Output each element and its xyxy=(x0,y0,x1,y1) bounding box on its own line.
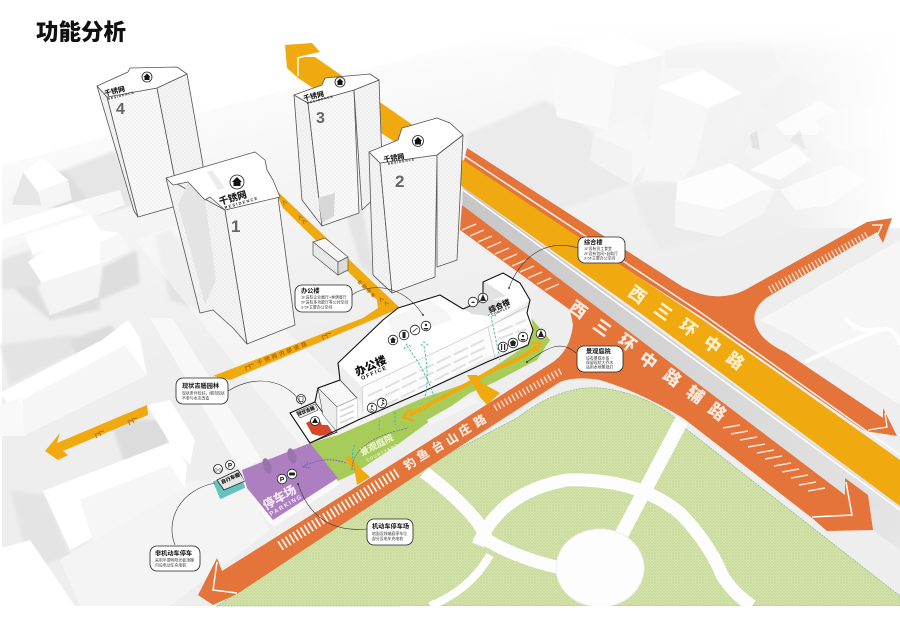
park paths xyxy=(424,420,752,606)
small box building xyxy=(313,238,348,275)
callout: 综合楼: 2F设有包间+自助厅 xyxy=(584,251,618,256)
road label: 西三环中路辅路: 环 xyxy=(615,330,639,356)
yellow main road with arrow xyxy=(285,43,900,510)
building labels: 办公楼 xyxy=(353,353,388,379)
courtyard green xyxy=(310,313,550,485)
tower 1: RESIDENCE xyxy=(224,195,259,210)
callout: 现状吉膳园林: 不参与本次改造 xyxy=(182,396,209,400)
tower 4 xyxy=(97,67,203,217)
tower 1: 千锈网 xyxy=(218,188,248,208)
east-west orange road with east arrow xyxy=(463,148,897,436)
courtyard route xyxy=(410,347,537,415)
parking lot: PARKING xyxy=(269,494,304,518)
courtyard label: 景观庭院 xyxy=(358,432,395,458)
residential lane xyxy=(45,187,400,460)
callout: 综合楼: 3-5F主要办公空间 xyxy=(584,256,615,261)
function icons xyxy=(367,293,546,413)
road label: 西三环中路: 西 xyxy=(625,282,649,308)
existing garden pavilion: 现状吉膳 xyxy=(296,404,316,418)
bicycle shed: P xyxy=(228,464,232,470)
residential lane: 长期停车 xyxy=(356,278,378,300)
title: 功能分析 xyxy=(36,20,126,45)
office and complex building: COMPLEX xyxy=(491,305,511,317)
road label: 西三环中路 xyxy=(625,282,747,374)
lane label: 千锈网内部道路 xyxy=(256,339,310,367)
road label: 钓鱼台山庄路: 山 xyxy=(443,429,461,448)
facade xyxy=(362,308,533,412)
callout: 办公楼: 办公楼 xyxy=(301,287,320,295)
tower 1 xyxy=(166,152,295,344)
road label: 西三环中路辅路: 中 xyxy=(636,348,661,374)
context buildings: north-east xyxy=(400,28,900,405)
office and complex building: 综合楼 xyxy=(487,296,512,315)
tower 2: 千锈网 xyxy=(383,151,405,164)
road label: 钓鱼台山庄路 xyxy=(401,411,489,473)
tower 4: 4 xyxy=(116,101,125,118)
callout: 现状吉膳园林 xyxy=(176,378,228,404)
circulation arrows xyxy=(352,313,500,470)
road label: 钓鱼台山庄路: 鱼 xyxy=(414,445,432,464)
road label: 西三环中路: 三 xyxy=(651,299,675,325)
road label: 钓鱼台山庄路: 庄 xyxy=(456,420,474,439)
office and complex building xyxy=(290,273,546,470)
callout: 非机动车停车: 采用半透明阳光板顶棚 xyxy=(155,558,194,562)
road label: 钓鱼台山庄路: 路 xyxy=(471,411,489,430)
road label: 西三环中路: 路 xyxy=(723,348,747,374)
callout: 景观庭院: 设有景观水系 xyxy=(586,356,609,360)
office and complex building: OFFICE xyxy=(360,365,389,382)
tower 3: 千锈网 xyxy=(302,89,325,103)
tower 2: RESIDENCE xyxy=(387,157,415,166)
callout: 机动车停车场 xyxy=(367,519,413,545)
callout: 综合楼 xyxy=(578,237,625,263)
callout: 非机动车停车: 内设电动车充电桩 xyxy=(155,562,186,568)
road label: 西三环中路辅路: 路 xyxy=(660,365,684,391)
callout: 办公楼: 1F设有企业展厅+林荫餐厅 xyxy=(301,294,347,300)
callout: 办公楼: 2F设有多功能厅等公共空间 xyxy=(301,300,348,304)
bicycle shed: 自行车棚 xyxy=(220,471,241,486)
callout: 现状吉膳园林: 现状吉膳园林 xyxy=(182,382,220,390)
road label: 西三环中路辅路: 辅 xyxy=(683,382,708,408)
callout: 非机动车停车 xyxy=(150,546,200,571)
crosswalks xyxy=(280,472,398,546)
callout: 机动车停车场: 部分设电车充电桩 xyxy=(372,536,403,541)
context buildings: west xyxy=(0,158,195,606)
median xyxy=(462,187,900,550)
road label: 西三环中路辅路: 西 xyxy=(566,297,590,323)
roof xyxy=(338,273,530,387)
tower 3: 3 xyxy=(316,110,325,127)
tower 3: RESIDENCE xyxy=(306,94,334,105)
tower 2: 2 xyxy=(395,172,404,191)
callout: 非机动车停车: 非机动车停车 xyxy=(155,550,192,558)
callout: 景观庭院: 运用本地景观灯 xyxy=(586,364,613,370)
outline xyxy=(290,273,533,443)
road label: 钓鱼台山庄路: 台 xyxy=(429,437,447,456)
road label: 西三环中路: 中 xyxy=(700,332,725,358)
road label: 钓鱼台山庄路: 钓 xyxy=(401,454,419,473)
callout: 办公楼 xyxy=(295,285,352,312)
parking lot: P xyxy=(280,476,285,484)
tower 4: RESIDENCE xyxy=(107,90,135,101)
road label: 西三环中路辅路: 三 xyxy=(590,315,614,341)
road label: 西三环中路辅路 xyxy=(566,297,729,425)
callout: 综合楼: 1F设有员工食堂 xyxy=(584,246,612,251)
connector lines xyxy=(172,245,578,545)
circular plaza xyxy=(556,529,644,607)
road label: 西三环中路辅路: 路 xyxy=(705,399,729,425)
callout: 现状吉膳园林: 现状条件较好，维持现状 xyxy=(182,390,225,396)
main orange road: 钓鱼台山庄路 and 西三环中路辅路 xyxy=(198,205,873,605)
bicycle shed xyxy=(212,460,246,500)
existing garden pavilion xyxy=(290,394,337,443)
tower 1: 1 xyxy=(231,217,240,236)
callout: 机动车停车场: 地面设线端庭停车位 xyxy=(372,531,407,536)
parking lot: 停车场 xyxy=(260,482,299,513)
courtyard green: COURTYARD xyxy=(365,442,399,463)
callout: 景观庭院 xyxy=(577,346,623,372)
crosswalk: east arm xyxy=(770,235,868,290)
callout: 景观庭院: 景观庭院 xyxy=(586,348,612,356)
green park xyxy=(217,388,900,636)
tower 2 xyxy=(369,118,463,293)
callout: 综合楼: 综合楼 xyxy=(584,238,603,246)
parking lot xyxy=(242,443,346,527)
callout: 办公楼: 3-5F主要办公空间 xyxy=(301,304,332,310)
road label: 西三环中路: 环 xyxy=(676,315,700,341)
context: shadows and lanes at left xyxy=(0,150,400,606)
low wing xyxy=(318,380,358,432)
tower 3 xyxy=(294,74,383,226)
tower 4: 千锈网 xyxy=(103,84,126,98)
callout: 景观庭院: 保留现状大乔木 xyxy=(586,360,613,365)
east quadrant light paths xyxy=(760,240,900,405)
callout: 机动车停车场: 机动车停车场 xyxy=(372,522,409,530)
